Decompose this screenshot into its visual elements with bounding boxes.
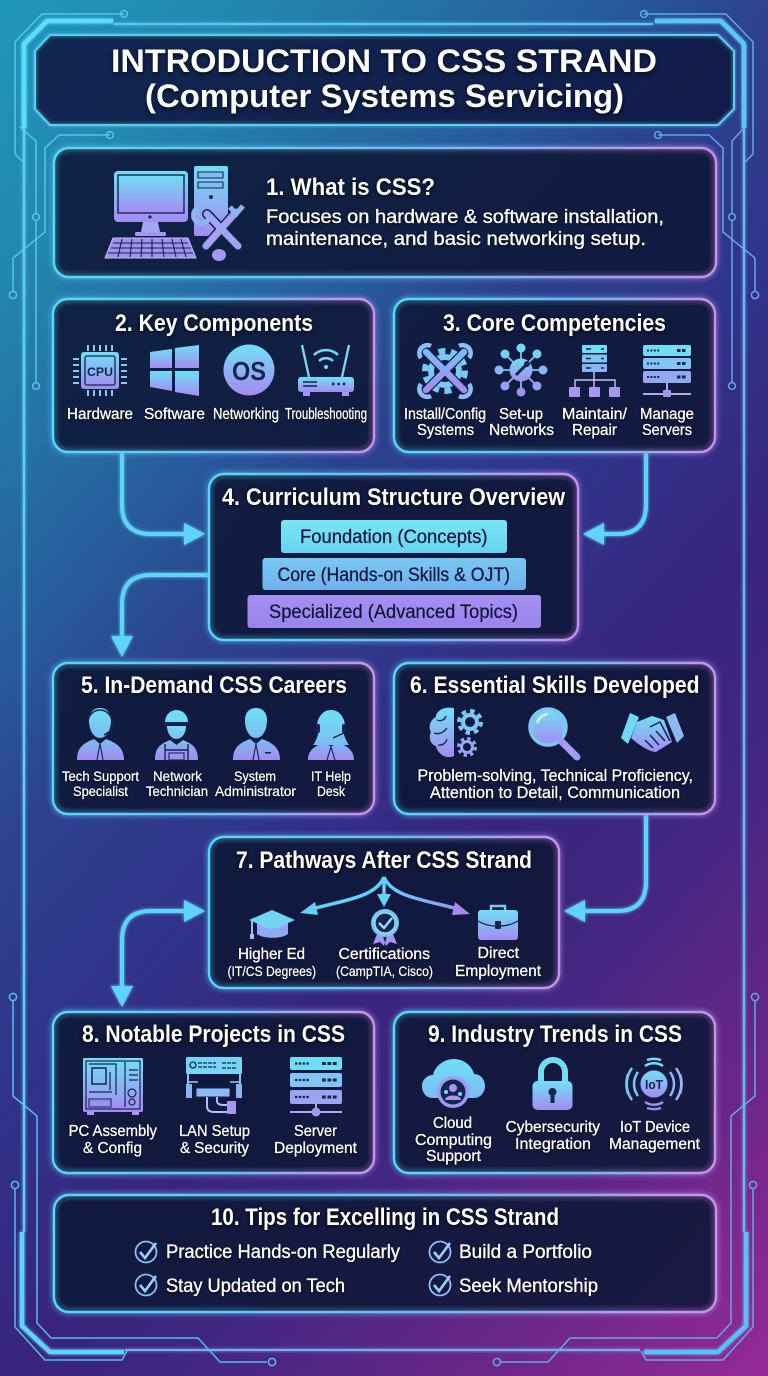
trend labels: Cybersecurity <box>506 1119 600 1136</box>
heading: 3. Core Competencies <box>443 310 666 337</box>
trend labels: Integration <box>515 1136 591 1153</box>
icon: Windows logo <box>150 345 199 396</box>
heading: 9. Industry Trends in CSS <box>428 1021 682 1048</box>
competency labels: Networks <box>489 422 554 439</box>
heading: 5. In-Demand CSS Careers <box>81 672 347 699</box>
icon: IT help desk <box>308 710 354 760</box>
panel 1: what is CSS <box>54 148 716 277</box>
pathway labels: (CampTIA, Cisco) <box>336 963 433 979</box>
branching arrows <box>300 877 470 915</box>
tier: specialized <box>248 595 541 628</box>
icon: brain and gears <box>430 708 481 757</box>
heading: 7. Pathways After CSS Strand <box>236 847 532 874</box>
icon: system administrator <box>233 708 280 760</box>
heading: 4. Curriculum Structure Overview <box>222 484 565 511</box>
panel 6: essential skills <box>394 663 715 814</box>
skills text: Attention to Detail, Communication <box>430 783 680 802</box>
heading: 8. Notable Projects in CSS <box>82 1021 345 1048</box>
panel 4: curriculum structure <box>209 474 578 640</box>
component labels: Networking <box>213 406 279 423</box>
heading: 2. Key Components <box>115 310 313 337</box>
icon: handshake <box>621 713 684 752</box>
project labels: LAN Setup <box>179 1123 250 1140</box>
tier: specialized: Specialized (Advanced Topics) <box>269 602 518 623</box>
career labels: IT Help <box>311 768 351 784</box>
skills text <box>418 766 693 802</box>
trend labels <box>415 1115 701 1165</box>
trend labels: Support <box>426 1148 482 1165</box>
competency labels: Maintain/ <box>562 406 628 423</box>
project labels: & Config <box>83 1140 142 1157</box>
component labels: Software <box>144 406 205 423</box>
panel 3: core competencies <box>394 299 715 452</box>
icon: briefcase <box>478 906 518 940</box>
icon: server rack <box>643 345 691 397</box>
pathway labels: Direct <box>478 945 520 962</box>
trend labels: Computing <box>415 1132 492 1149</box>
pathway labels: (IT/CS Degrees) <box>228 963 316 979</box>
tip: stay updated: Stay Updated on Tech <box>166 1276 345 1297</box>
panel 9: industry trends <box>394 1012 715 1173</box>
icon: certification badge <box>371 909 399 946</box>
competency labels: Servers <box>642 422 692 439</box>
icon: tech support person <box>77 708 124 760</box>
icon: OS: OS <box>232 356 266 386</box>
component labels <box>67 406 367 423</box>
career labels: Technician <box>146 783 208 799</box>
project labels: Deployment <box>274 1140 358 1157</box>
tier: core <box>262 558 526 590</box>
icon: IoT <box>626 1059 682 1109</box>
pathway labels: Higher Ed <box>238 946 305 963</box>
icon: network technician <box>155 710 198 760</box>
title: (Computer Systems Servicing) <box>145 78 624 114</box>
heading: 1. What is CSS? <box>266 174 435 201</box>
project labels: PC Assembly <box>69 1123 157 1140</box>
icon: magnifying glass <box>530 709 577 757</box>
career labels: Specialist <box>73 783 128 799</box>
competency labels <box>404 406 694 439</box>
trend labels: IoT Device <box>620 1119 690 1136</box>
trend labels: Cloud <box>433 1115 472 1132</box>
icon: LAN setup <box>186 1057 242 1114</box>
panel 10: tips <box>54 1195 716 1312</box>
competency labels: Install/Config <box>404 406 486 423</box>
pathway labels: Employment <box>455 963 542 980</box>
panel 7: pathways <box>209 837 559 988</box>
trend labels: Management <box>609 1136 701 1153</box>
icon: hierarchy server <box>569 345 620 397</box>
career labels: Network <box>153 768 203 784</box>
competency labels: Systems <box>417 422 474 439</box>
competency labels: Set-up <box>499 406 543 423</box>
skills text: Problem-solving, Technical Proficiency, <box>418 766 693 785</box>
icon: tools and gear <box>419 345 471 397</box>
description: Focuses on hardware & software installation, <box>266 207 664 228</box>
icon: server deployment <box>290 1057 342 1116</box>
component labels: Troubleshooting <box>285 406 367 423</box>
tip: portfolio: Build a Portfolio <box>459 1242 592 1263</box>
career labels <box>62 768 351 799</box>
icon: CPU: CPU <box>87 365 113 379</box>
icon: graduation cap <box>249 910 295 939</box>
panel 2: key components <box>53 299 374 452</box>
tier: core: Core (Hands-on Skills & OJT) <box>278 565 510 586</box>
icon: padlock <box>532 1060 572 1110</box>
tip: mentorship: Seek Mentorship <box>459 1276 598 1297</box>
title <box>111 43 657 114</box>
panel 5: careers <box>53 663 374 814</box>
icon: cloud <box>422 1059 485 1108</box>
title: INTRODUCTION TO CSS STRAND <box>111 43 657 79</box>
competency labels: Manage <box>640 406 694 423</box>
icon: router <box>298 345 354 396</box>
panel 8: notable projects <box>53 1012 374 1173</box>
description <box>266 207 664 250</box>
career labels: Tech Support <box>62 768 139 784</box>
icon: PC case <box>83 1058 143 1115</box>
project labels: Server <box>294 1123 338 1140</box>
icon: CPU <box>73 345 127 396</box>
arrows between panels <box>111 452 646 1007</box>
icon: network hub <box>494 344 548 396</box>
project labels <box>69 1123 358 1157</box>
pathway labels <box>228 945 542 980</box>
career labels: Administrator <box>215 783 296 799</box>
competency labels: Repair <box>572 422 618 439</box>
heading: 10. Tips for Excelling in CSS Strand <box>211 1204 559 1231</box>
component labels: Hardware <box>67 406 133 423</box>
icon: IoT: IoT <box>645 1077 663 1092</box>
project labels: & Security <box>180 1140 249 1157</box>
career labels: System <box>234 768 276 784</box>
header panel <box>35 35 734 125</box>
tip: practice: Practice Hands-on Regularly <box>166 1242 400 1263</box>
pathway labels: Certifications <box>338 946 430 963</box>
career labels: Desk <box>317 783 346 799</box>
heading: 6. Essential Skills Developed <box>410 672 700 699</box>
tier: foundation: Foundation (Concepts) <box>300 527 488 548</box>
description: maintenance, and basic networking setup. <box>266 229 646 250</box>
icon: OS <box>224 344 274 396</box>
tier: foundation <box>281 520 507 553</box>
icon: computer and tools <box>105 166 243 261</box>
